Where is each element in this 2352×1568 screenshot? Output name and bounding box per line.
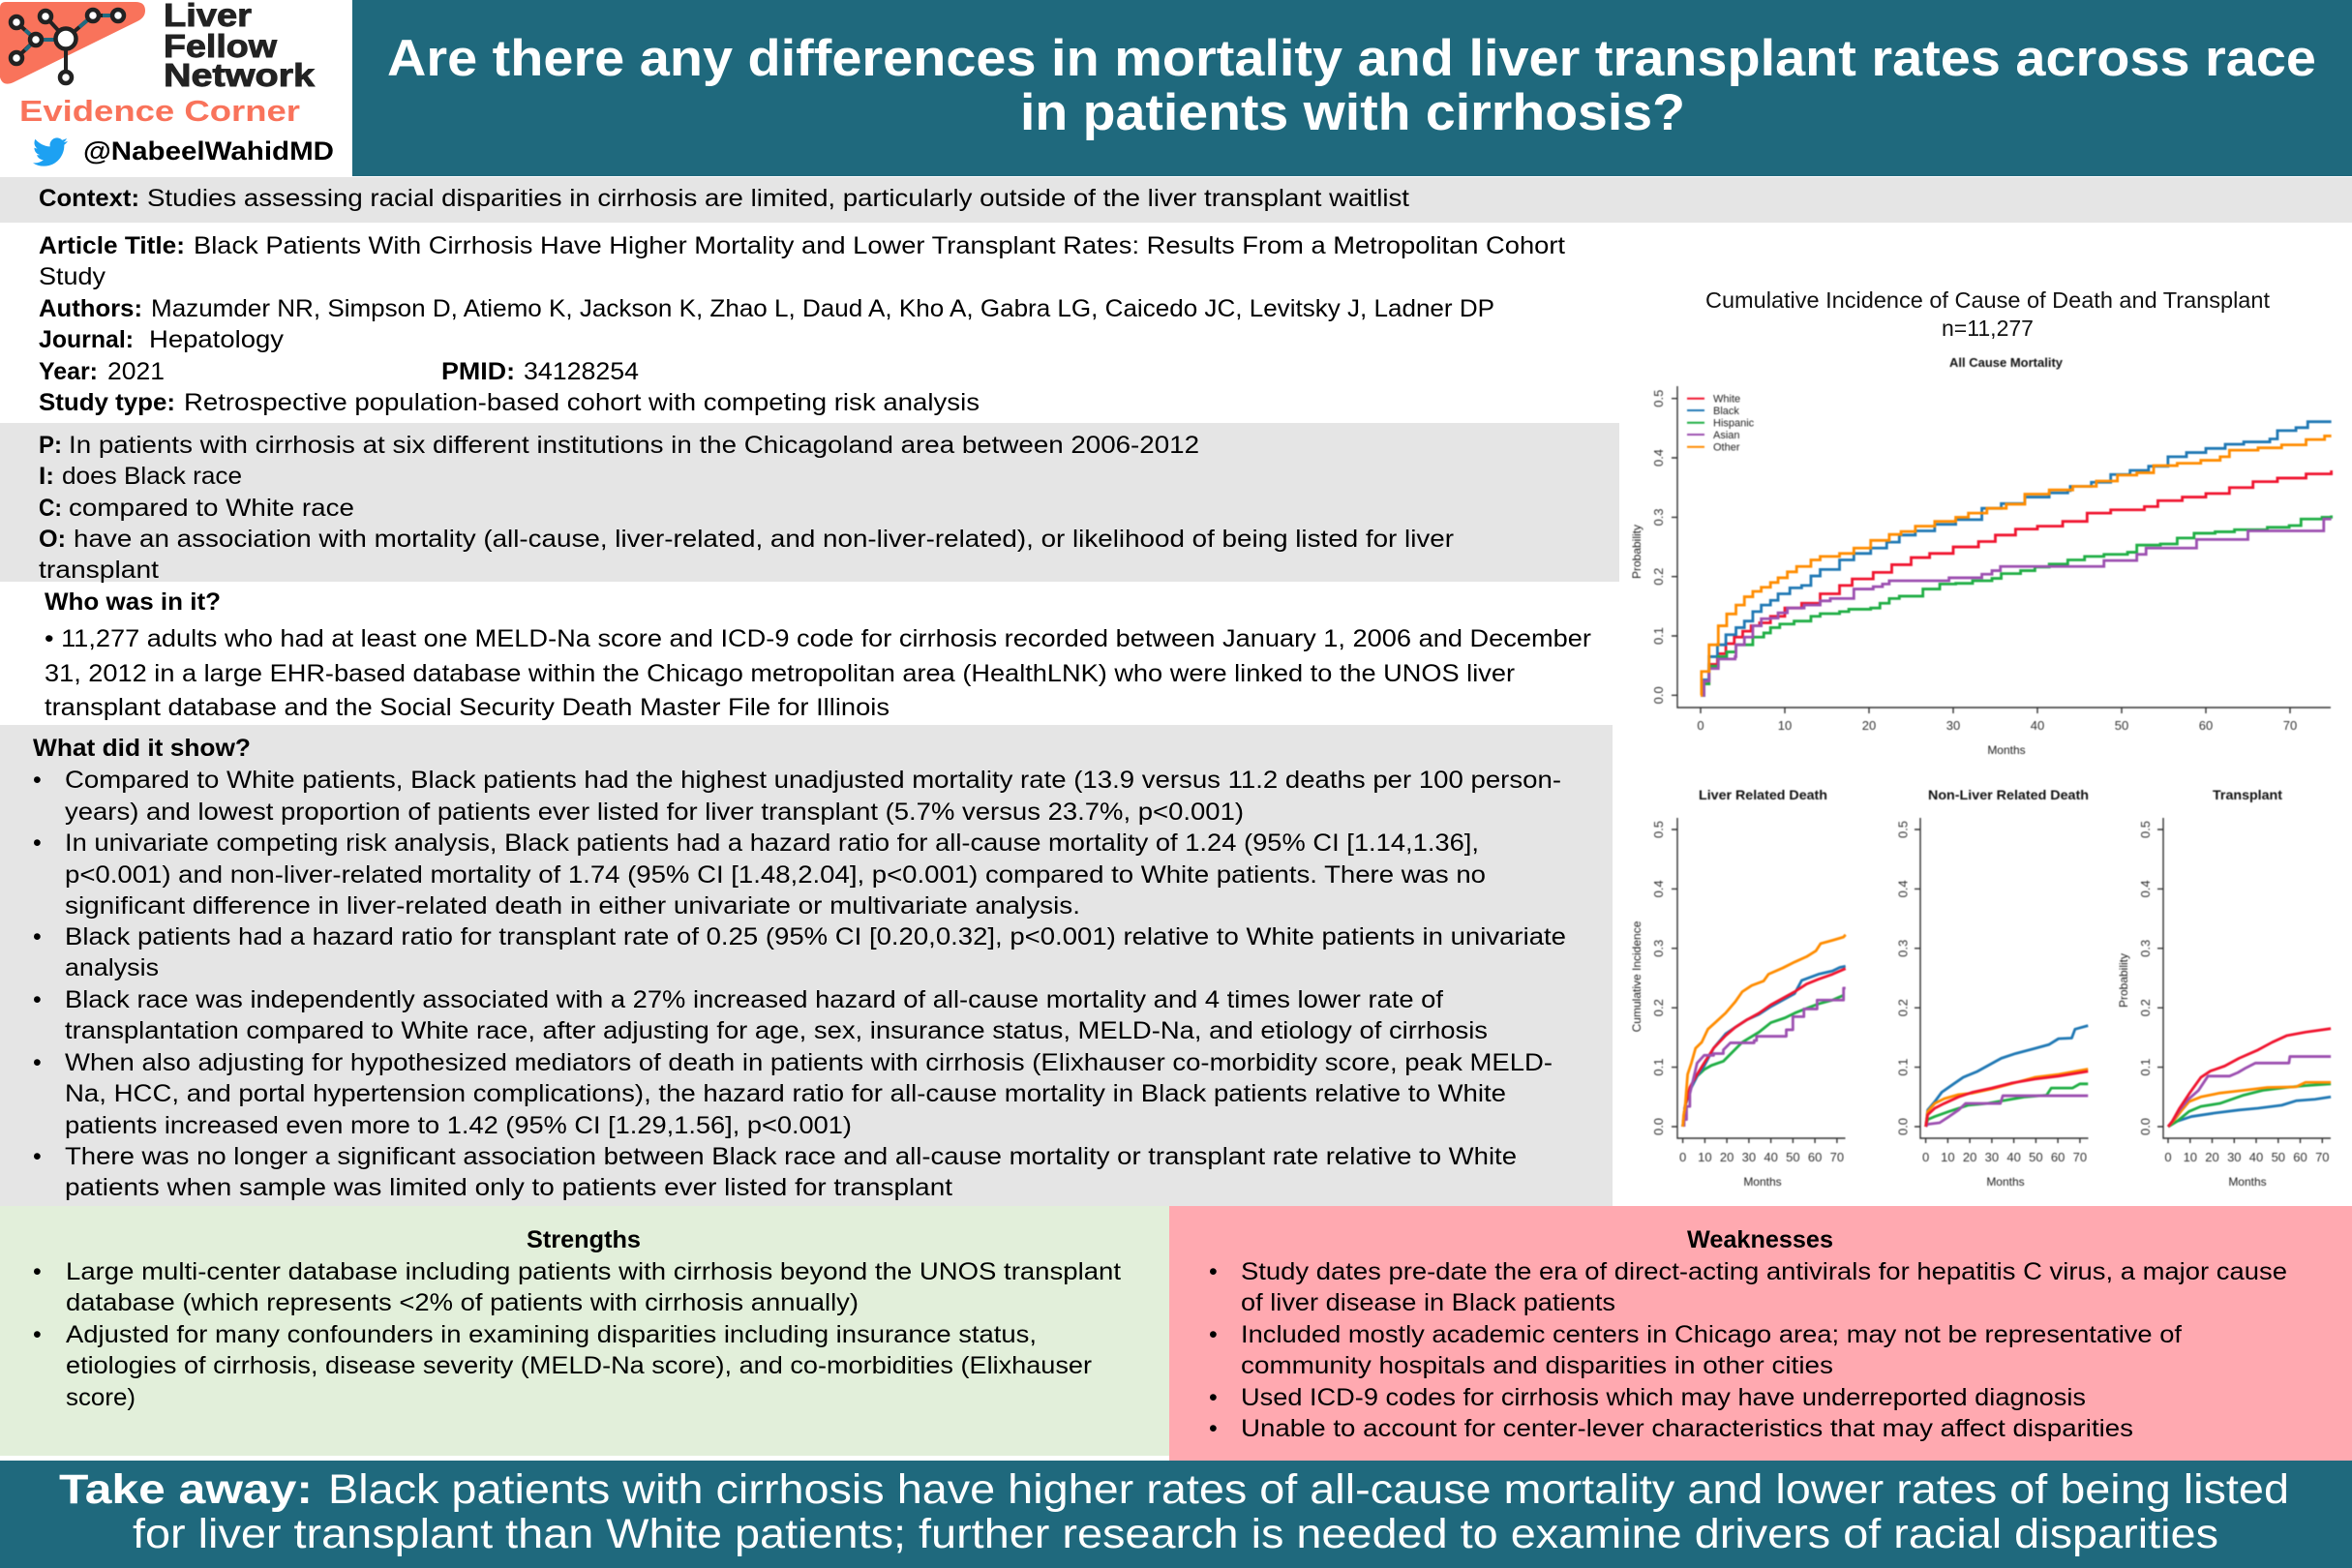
results bullet list: • xyxy=(33,1049,42,1076)
axes: 60 xyxy=(2199,718,2213,733)
legend: White xyxy=(1713,393,1740,405)
cumulative incidence curves xyxy=(1701,422,2332,695)
strengths bullet list xyxy=(33,1258,1121,1411)
axes: 0 xyxy=(1697,718,1704,733)
take away text: for liver transplant than White patients; further research is needed to examine drivers of racial disparities xyxy=(133,1511,2218,1557)
axes: 70 xyxy=(2315,1150,2330,1164)
axes: 0.4 xyxy=(1651,880,1666,897)
axes: Months xyxy=(1986,1175,2025,1189)
results bullet list: When also adjusting for hypothesized mediators of death in patients with cirrhosis (Elixhauser co-morbidity score, peak MELD- xyxy=(65,1049,1553,1076)
journal xyxy=(39,326,285,353)
axes xyxy=(1895,818,2089,1189)
axes xyxy=(1630,386,2331,757)
axes: 0 xyxy=(1922,1150,1929,1164)
axes: 20 xyxy=(1963,1150,1976,1164)
axes: 30 xyxy=(1985,1150,1999,1164)
strengths bullet list: database (which represents <2% of patients with cirrhosis annually) xyxy=(66,1289,859,1316)
take away text: Take away: xyxy=(59,1466,313,1513)
logo block xyxy=(0,0,334,166)
axes: 0.4 xyxy=(1895,880,1911,897)
legend: Hispanic xyxy=(1713,418,1755,430)
axes: 0.2 xyxy=(1651,999,1666,1016)
icon: liver network logo xyxy=(0,2,145,84)
heading: What did it show? xyxy=(33,735,251,762)
results bullet list: p<0.001) and non-liver-related mortality of 1.74 (95% CI [1.48,2.04], p<0.001) compared to White patients. There was no xyxy=(65,861,1486,889)
axes: 30 xyxy=(1946,718,1960,733)
title xyxy=(387,30,2316,141)
panel: article details xyxy=(39,232,1565,416)
axes: 20 xyxy=(2205,1150,2219,1164)
axes: Cumulative Incidence xyxy=(1630,920,1643,1032)
context text: Studies assessing racial disparities in cirrhosis are limited, particularly outside of the liver transplant waitlist xyxy=(147,185,1409,212)
weaknesses bullet list: of liver disease in Black patients xyxy=(1241,1289,1615,1316)
results bullet list: • xyxy=(33,767,42,794)
axes: 0.0 xyxy=(1651,686,1666,704)
results bullet list: • xyxy=(33,986,42,1013)
axes xyxy=(1630,818,1845,1189)
axes: Probability xyxy=(2117,953,2130,1008)
results bullet list: patients when sample was limited only to patients ever listed for transplant xyxy=(65,1174,952,1201)
results bullet list: significant difference in liver-related death in either univariate or multivariate analysis. xyxy=(65,892,1080,920)
axes xyxy=(2117,818,2331,1189)
axes: 40 xyxy=(2006,1150,2021,1164)
weaknesses bullet list xyxy=(1209,1258,2287,1442)
chart title xyxy=(1705,287,2271,341)
axes: 10 xyxy=(1778,718,1792,733)
strengths bullet list: etiologies of cirrhosis, disease severity (MELD-Na score), and co-morbidities (Elixhauser xyxy=(66,1352,1092,1379)
article title xyxy=(39,232,1565,290)
panel: who was in it xyxy=(45,588,1591,721)
panel: context xyxy=(0,177,2352,223)
panel: PICO xyxy=(0,423,1619,584)
title: Are there any differences in mortality and liver transplant rates across race xyxy=(387,30,2316,87)
results bullet list: • xyxy=(33,1143,42,1170)
cumulative incidence curves xyxy=(1926,1026,2088,1127)
authors: Mazumder NR, Simpson D, Atiemo K, Jackson K, Zhao L, Daud A, Kho A, Gabra LG, Caicedo JC, Levitsky J, Ladner DP xyxy=(151,295,1494,322)
axes: Months xyxy=(1987,743,2026,757)
chart: liver related death xyxy=(1630,787,1846,1189)
results bullet list: patients increased even more to 1.42 (95% CI [1.29,1.56], p<0.001) xyxy=(65,1112,852,1139)
year: Year: xyxy=(39,358,98,385)
article title: Black Patients With Cirrhosis Have Higher Mortality and Lower Transplant Rates: Results From a Metropolitan Cohort xyxy=(194,232,1565,259)
axes: 0.0 xyxy=(2138,1118,2153,1135)
strengths bullet list: Large multi-center database including patients with cirrhosis beyond the UNOS transplant xyxy=(66,1258,1121,1285)
population description: • 11,277 adults who had at least one MELD-Na score and ICD-9 code for cirrhosis recorded between January 1, 2006 and December xyxy=(45,625,1591,652)
evidence corner label: Evidence Corner xyxy=(19,94,300,128)
strengths bullet list: • xyxy=(33,1258,42,1285)
axes: 0.4 xyxy=(2138,880,2153,897)
axes: 0 xyxy=(2164,1150,2172,1164)
axes: 40 xyxy=(1764,1150,1778,1164)
axes: 0.5 xyxy=(1651,390,1666,407)
weaknesses bullet list: Included mostly academic centers in Chicago area; may not be representative of xyxy=(1241,1321,2182,1348)
weaknesses bullet list: Unable to account for center-lever characteristics that may affect disparities xyxy=(1241,1415,2133,1442)
icon: twitter bird xyxy=(33,137,68,166)
axes: Probability xyxy=(1630,525,1643,579)
results bullet list: In univariate competing risk analysis, Black patients had a hazard ratio for all-cause mortality of 1.24 (95% CI [1.14,1.36], xyxy=(65,829,1479,857)
outcome: O: xyxy=(39,526,66,553)
logo wordmark xyxy=(164,0,316,93)
chart heading: Transplant xyxy=(2213,787,2282,802)
axes: 0.3 xyxy=(1895,940,1911,957)
axes: 10 xyxy=(2184,1150,2197,1164)
chart: transplant xyxy=(2117,787,2331,1189)
axes: 10 xyxy=(1698,1150,1712,1164)
axes: 0.5 xyxy=(1651,821,1666,838)
panel: take away xyxy=(0,1461,2352,1568)
population description: 31, 2012 in a large EHR-based database within the Chicago metropolitan area (HealthLNK) who were linked to the UNOS liver xyxy=(45,660,1515,687)
axes: 0.3 xyxy=(1651,940,1666,957)
cumulative incidence curves xyxy=(2168,1029,2331,1127)
journal: Journal: xyxy=(39,326,134,353)
results bullet list: • xyxy=(33,829,42,857)
axes: 70 xyxy=(2073,1150,2087,1164)
axes: 70 xyxy=(2283,718,2297,733)
title: in patients with cirrhosis? xyxy=(1020,84,1685,141)
population: P: xyxy=(39,432,62,459)
legend: Asian xyxy=(1713,430,1740,441)
axes: 60 xyxy=(1808,1150,1822,1164)
results bullet list: Compared to White patients, Black patients had the highest unadjusted mortality rate (13.9 versus 11.2 deaths per 100 person- xyxy=(65,767,1561,794)
logo wordmark: Network xyxy=(164,57,316,93)
axes: 0.5 xyxy=(1895,821,1911,838)
axes: 10 xyxy=(1941,1150,1955,1164)
take away text xyxy=(59,1466,2289,1557)
axes: 40 xyxy=(2031,718,2044,733)
axes: 50 xyxy=(2029,1150,2043,1164)
axes: 0.2 xyxy=(1651,568,1666,586)
heading: Strengths xyxy=(527,1226,641,1253)
weaknesses bullet list: Used ICD-9 codes for cirrhosis which may have underreported diagnosis xyxy=(1241,1384,2086,1411)
article title: Study xyxy=(39,263,106,290)
chart heading: Liver Related Death xyxy=(1699,787,1827,802)
chart heading: All Cause Mortality xyxy=(1949,355,2064,370)
comparison: C: xyxy=(39,495,62,522)
article title: Article Title: xyxy=(39,232,185,259)
journal: Hepatology xyxy=(149,326,285,353)
strengths bullet list: Adjusted for many confounders in examining disparities including insurance status, xyxy=(66,1321,1037,1348)
axes: 0.3 xyxy=(2138,940,2153,957)
axes: 60 xyxy=(2051,1150,2065,1164)
axes: 40 xyxy=(2249,1150,2263,1164)
year: 2021 xyxy=(107,358,165,385)
outcome: have an association with mortality (all-cause, liver-related, and non-liver-related), or likelihood of being listed for liver xyxy=(74,526,1454,553)
axes: Months xyxy=(2228,1175,2267,1189)
axes: 60 xyxy=(2293,1150,2307,1164)
logo wordmark: Fellow xyxy=(164,28,277,64)
weaknesses bullet list: Study dates pre-date the era of direct-acting antivirals for hepatitis C virus, a major cause xyxy=(1241,1258,2287,1285)
axes: 0.2 xyxy=(1895,999,1911,1016)
legend: Black xyxy=(1713,406,1739,417)
results bullet list: Black patients had a hazard ratio for transplant rate of 0.25 (95% CI [0.20,0.32], p<0.001) relative to White patients in univariate xyxy=(65,923,1566,950)
weaknesses bullet list: • xyxy=(1209,1384,1218,1411)
pmid: 34128254 xyxy=(524,358,639,385)
results bullet list: Na, HCC, and portal hypertension complications), the hazard ratio for all-cause mortality in Black patients relative to White xyxy=(65,1080,1506,1107)
axes: 0.4 xyxy=(1651,449,1666,467)
population description xyxy=(45,625,1591,721)
chart heading: Non-Liver Related Death xyxy=(1928,787,2089,802)
axes: 50 xyxy=(1786,1150,1800,1164)
weaknesses bullet list: • xyxy=(1209,1321,1218,1348)
axes: 20 xyxy=(1862,718,1876,733)
twitter handle: @NabeelWahidMD xyxy=(83,136,334,166)
intervention: I: xyxy=(39,463,54,490)
weaknesses bullet list: • xyxy=(1209,1258,1218,1285)
legend xyxy=(1687,393,1755,453)
weaknesses bullet list: • xyxy=(1209,1415,1218,1442)
authors: Authors: xyxy=(39,295,142,322)
strengths bullet list: • xyxy=(33,1321,42,1348)
comparison: compared to White race xyxy=(69,495,354,522)
axes: Months xyxy=(1743,1175,1782,1189)
axes: 0.1 xyxy=(1651,1059,1666,1076)
chart: all cause mortality xyxy=(1630,355,2332,757)
results bullet list: transplantation compared to White race, after adjusting for age, sex, insurance status, MELD-Na, and etiology of cirrhosis xyxy=(65,1017,1488,1044)
axes: 0.1 xyxy=(2138,1059,2153,1076)
header banner xyxy=(352,0,2352,176)
outcome: transplant xyxy=(39,557,159,584)
pmid: PMID: xyxy=(441,358,515,385)
heading: Weaknesses xyxy=(1687,1226,1833,1253)
intervention: does Black race xyxy=(62,463,242,490)
axes: 50 xyxy=(2272,1150,2285,1164)
chart title: n=11,277 xyxy=(1942,316,2034,341)
panel: weaknesses xyxy=(1169,1206,2352,1461)
results bullet list: years) and lowest proportion of patients ever listed for liver transplant (5.7% versus 23.7%, p<0.001) xyxy=(65,799,1244,826)
legend: Other xyxy=(1713,441,1740,453)
axes: 0.1 xyxy=(1651,627,1666,645)
results bullet list: analysis xyxy=(65,954,159,981)
axes: 30 xyxy=(1742,1150,1756,1164)
pmid xyxy=(441,358,639,385)
results bullet list xyxy=(33,767,1566,1201)
results bullet list: • xyxy=(33,923,42,950)
study type: Retrospective population-based cohort with competing risk analysis xyxy=(184,389,980,416)
population: In patients with cirrhosis at six different institutions in the Chicagoland area between 2006-2012 xyxy=(69,432,1199,459)
chart: non-liver related death xyxy=(1895,787,2089,1189)
axes: 50 xyxy=(2115,718,2128,733)
strengths bullet list: score) xyxy=(66,1384,136,1411)
axes: 30 xyxy=(2227,1150,2242,1164)
results bullet list: There was no longer a significant association between Black race and all-cause mortality or transplant rate relative to White xyxy=(65,1143,1517,1170)
axes: 0.2 xyxy=(2138,999,2153,1016)
results bullet list: Black race was independently associated with a 27% increased hazard of all-cause mortality and 4 times lower rate of xyxy=(65,986,1443,1013)
axes: 0.1 xyxy=(1895,1059,1911,1076)
axes: 0 xyxy=(1679,1150,1686,1164)
weaknesses bullet list: community hospitals and disparities in other cities xyxy=(1241,1352,1833,1379)
panel: strengths xyxy=(0,1206,1169,1456)
panel: what did it show xyxy=(0,725,1613,1206)
cumulative incidence curves xyxy=(1683,935,1846,1127)
study type: Study type: xyxy=(39,389,175,416)
axes: 0.5 xyxy=(2138,821,2153,838)
heading: Who was in it? xyxy=(45,588,221,616)
population description: transplant database and the Social Security Death Master File for Illinois xyxy=(45,694,890,721)
axes: 70 xyxy=(1830,1150,1844,1164)
axes: 20 xyxy=(1720,1150,1734,1164)
chart title: Cumulative Incidence of Cause of Death and Transplant xyxy=(1705,287,2271,313)
axes: 0.0 xyxy=(1895,1118,1911,1135)
outcome xyxy=(39,526,1454,584)
year xyxy=(39,358,165,385)
context text: Context: xyxy=(39,185,139,212)
take away text: Black patients with cirrhosis have higher rates of all-cause mortality and lower rates of being listed xyxy=(328,1466,2289,1513)
axes: 0.3 xyxy=(1651,508,1666,526)
axes: 0.0 xyxy=(1651,1118,1666,1135)
